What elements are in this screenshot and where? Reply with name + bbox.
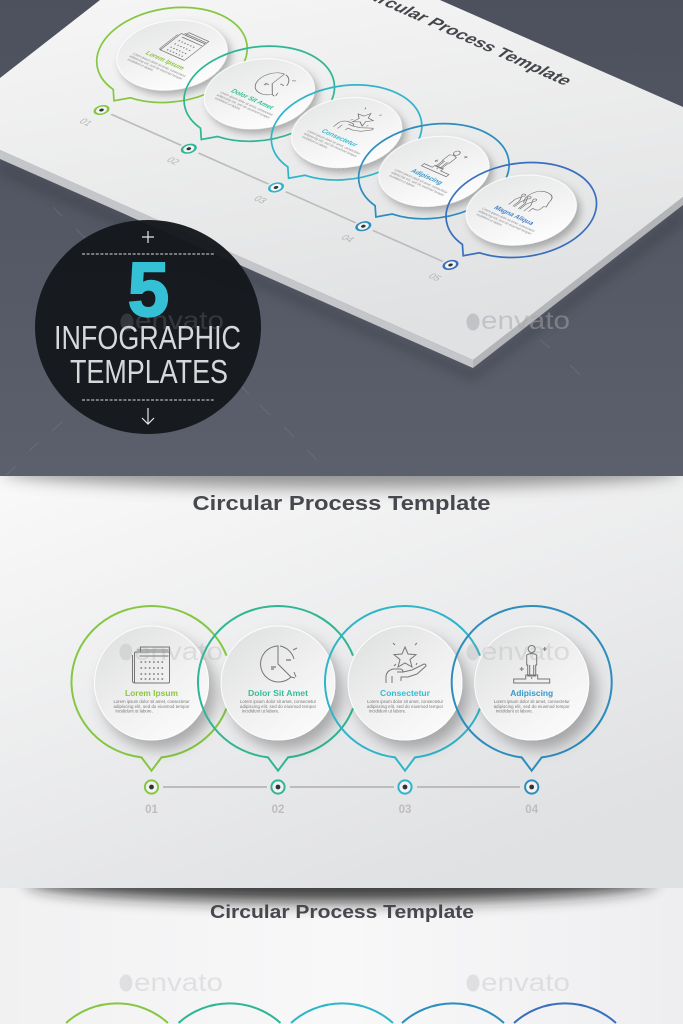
step 1 node xyxy=(145,780,158,794)
step 5 on sheet: adipiscing elit, sed do eiusmod tempor xyxy=(477,210,533,236)
step 1 heading: Lorem Ipsum xyxy=(125,688,178,698)
step 5 on sheet: Lorem ipsum dolor sit amet, consectetur xyxy=(481,207,537,233)
icon: down arrow xyxy=(142,408,154,424)
step 2 on sheet: Dolor Sit Amet xyxy=(229,88,275,111)
bottom bubbles xyxy=(66,1003,616,1023)
watermark on badge: envato xyxy=(135,307,224,335)
step 2 body: incididunt ut labore. xyxy=(242,709,279,714)
timeline on sheet xyxy=(111,114,443,262)
step 3 on sheet: 03 xyxy=(251,194,269,206)
step 4 on sheet: 04 xyxy=(338,233,357,245)
watermarks: envato xyxy=(481,638,570,666)
step 1 on sheet: adipiscing elit, sed do eiusmod tempor xyxy=(128,55,184,81)
step 4 heading: Adipiscing xyxy=(510,688,553,698)
watermarks: envato xyxy=(134,638,223,666)
step 4 body: adipiscing elit, sed do eiusmod tempor xyxy=(494,704,570,709)
heading: Circular Process Template xyxy=(192,493,490,515)
step 3 body: adipiscing elit, sed do eiusmod tempor xyxy=(367,704,444,709)
step 1 body: Lorem ipsum dolor sit amet, consectetur xyxy=(114,699,190,704)
watermark on sheet: envato xyxy=(481,307,570,335)
step 3 number: 03 xyxy=(399,804,411,816)
step 2 on sheet: Lorem ipsum dolor sit amet, consectetur xyxy=(219,91,275,117)
icon: plus xyxy=(142,231,154,243)
bottom watermarks: envato xyxy=(481,969,570,997)
badge text line one: INFOGRAPHIC xyxy=(54,319,241,356)
bottom watermarks: envato xyxy=(134,969,223,997)
step 4 body xyxy=(494,700,570,712)
sheet thickness xyxy=(0,150,473,368)
step 1 on sheet xyxy=(80,6,248,126)
step 4 on sheet: Lorem ipsum dolor sit amet, consectetur xyxy=(393,168,450,194)
step 3 body: incididunt ut labore. xyxy=(369,709,406,714)
step 5 on sheet: Magna Aliqua xyxy=(492,205,535,227)
step 4 on sheet: incididunt ut labore. xyxy=(388,174,417,188)
step 3 on sheet: Lorem ipsum dolor sit amet, consectetur xyxy=(306,129,362,156)
step 2 number: 02 xyxy=(272,804,284,816)
watermark on sheet xyxy=(466,312,569,330)
step 1 on sheet: incididunt ut labore. xyxy=(126,58,155,72)
step 2 xyxy=(198,606,353,816)
panel: bottom five step template xyxy=(0,888,683,1024)
step 4 on sheet xyxy=(342,122,510,242)
step 4 on sheet: Adipiscing xyxy=(408,168,444,186)
number five: 5 xyxy=(128,248,169,333)
sheet shadow xyxy=(0,160,683,382)
step 2 body xyxy=(240,700,316,712)
step 3 on sheet: adipiscing elit, sed do eiusmod tempor xyxy=(303,132,359,158)
step 3 heading: Consectetur xyxy=(380,688,431,698)
step 2 body: adipiscing elit, sed do eiusmod tempor xyxy=(240,704,317,709)
step 1 body xyxy=(114,700,190,712)
step 4 body: Lorem ipsum dolor sit amet, consectetur xyxy=(494,699,570,704)
step 1 body: adipiscing elit, sed do eiusmod tempor xyxy=(114,704,190,709)
step 1 xyxy=(71,606,226,816)
panel: top isometric mockup scene xyxy=(0,0,683,476)
step 1 body: incididunt ut labore. xyxy=(116,709,153,714)
step 3 node xyxy=(398,780,412,794)
step 3 on sheet: incididunt ut labore. xyxy=(301,135,330,149)
step 2 heading: Dolor Sit Amet xyxy=(248,688,308,698)
step 3 body: Lorem ipsum dolor sit amet, consectetur xyxy=(367,699,444,704)
step 2 on sheet: adipiscing elit, sed do eiusmod tempor xyxy=(215,93,272,119)
step 1 on sheet: 01 xyxy=(76,117,95,128)
step 5 on sheet: incididunt ut labore. xyxy=(475,213,504,227)
bottom watermarks xyxy=(120,974,569,992)
bottom heading: Circular Process Template xyxy=(210,902,474,922)
step 1 number: 01 xyxy=(145,804,158,816)
step 3 xyxy=(325,606,480,816)
panel: flat four step template xyxy=(0,452,683,888)
step 2 on sheet: incididunt ut labore. xyxy=(213,97,242,111)
timeline xyxy=(163,786,520,788)
step 3 body xyxy=(367,700,443,712)
step 4 body: incididunt ut labore. xyxy=(496,709,533,714)
step 4 number: 04 xyxy=(525,804,539,816)
step 1 on sheet: Lorem ipsum dolor sit amet, consectetur xyxy=(132,52,188,78)
step 2 body: Lorem ipsum dolor sit amet, consectetur xyxy=(240,699,317,704)
step 2 on sheet: 02 xyxy=(163,156,182,167)
step 4 xyxy=(452,606,612,816)
step 4 on sheet: adipiscing elit, sed do eiusmod tempor xyxy=(390,171,446,197)
step 4 node xyxy=(525,780,538,794)
isometric sheet surface xyxy=(0,0,683,360)
step 2 on sheet xyxy=(167,45,336,165)
step 1 on sheet: Lorem Ipsum xyxy=(143,50,186,71)
step 3 on sheet: Consectetur xyxy=(319,128,359,148)
step 3 on sheet xyxy=(254,84,423,204)
step 5 on sheet: 05 xyxy=(425,272,444,283)
step 2 node xyxy=(271,780,285,794)
badge text line two: TEMPLATES xyxy=(70,353,228,390)
watermarks xyxy=(120,644,569,660)
step 5 on sheet xyxy=(429,162,598,281)
badge: 5 infographic templates xyxy=(35,220,261,434)
